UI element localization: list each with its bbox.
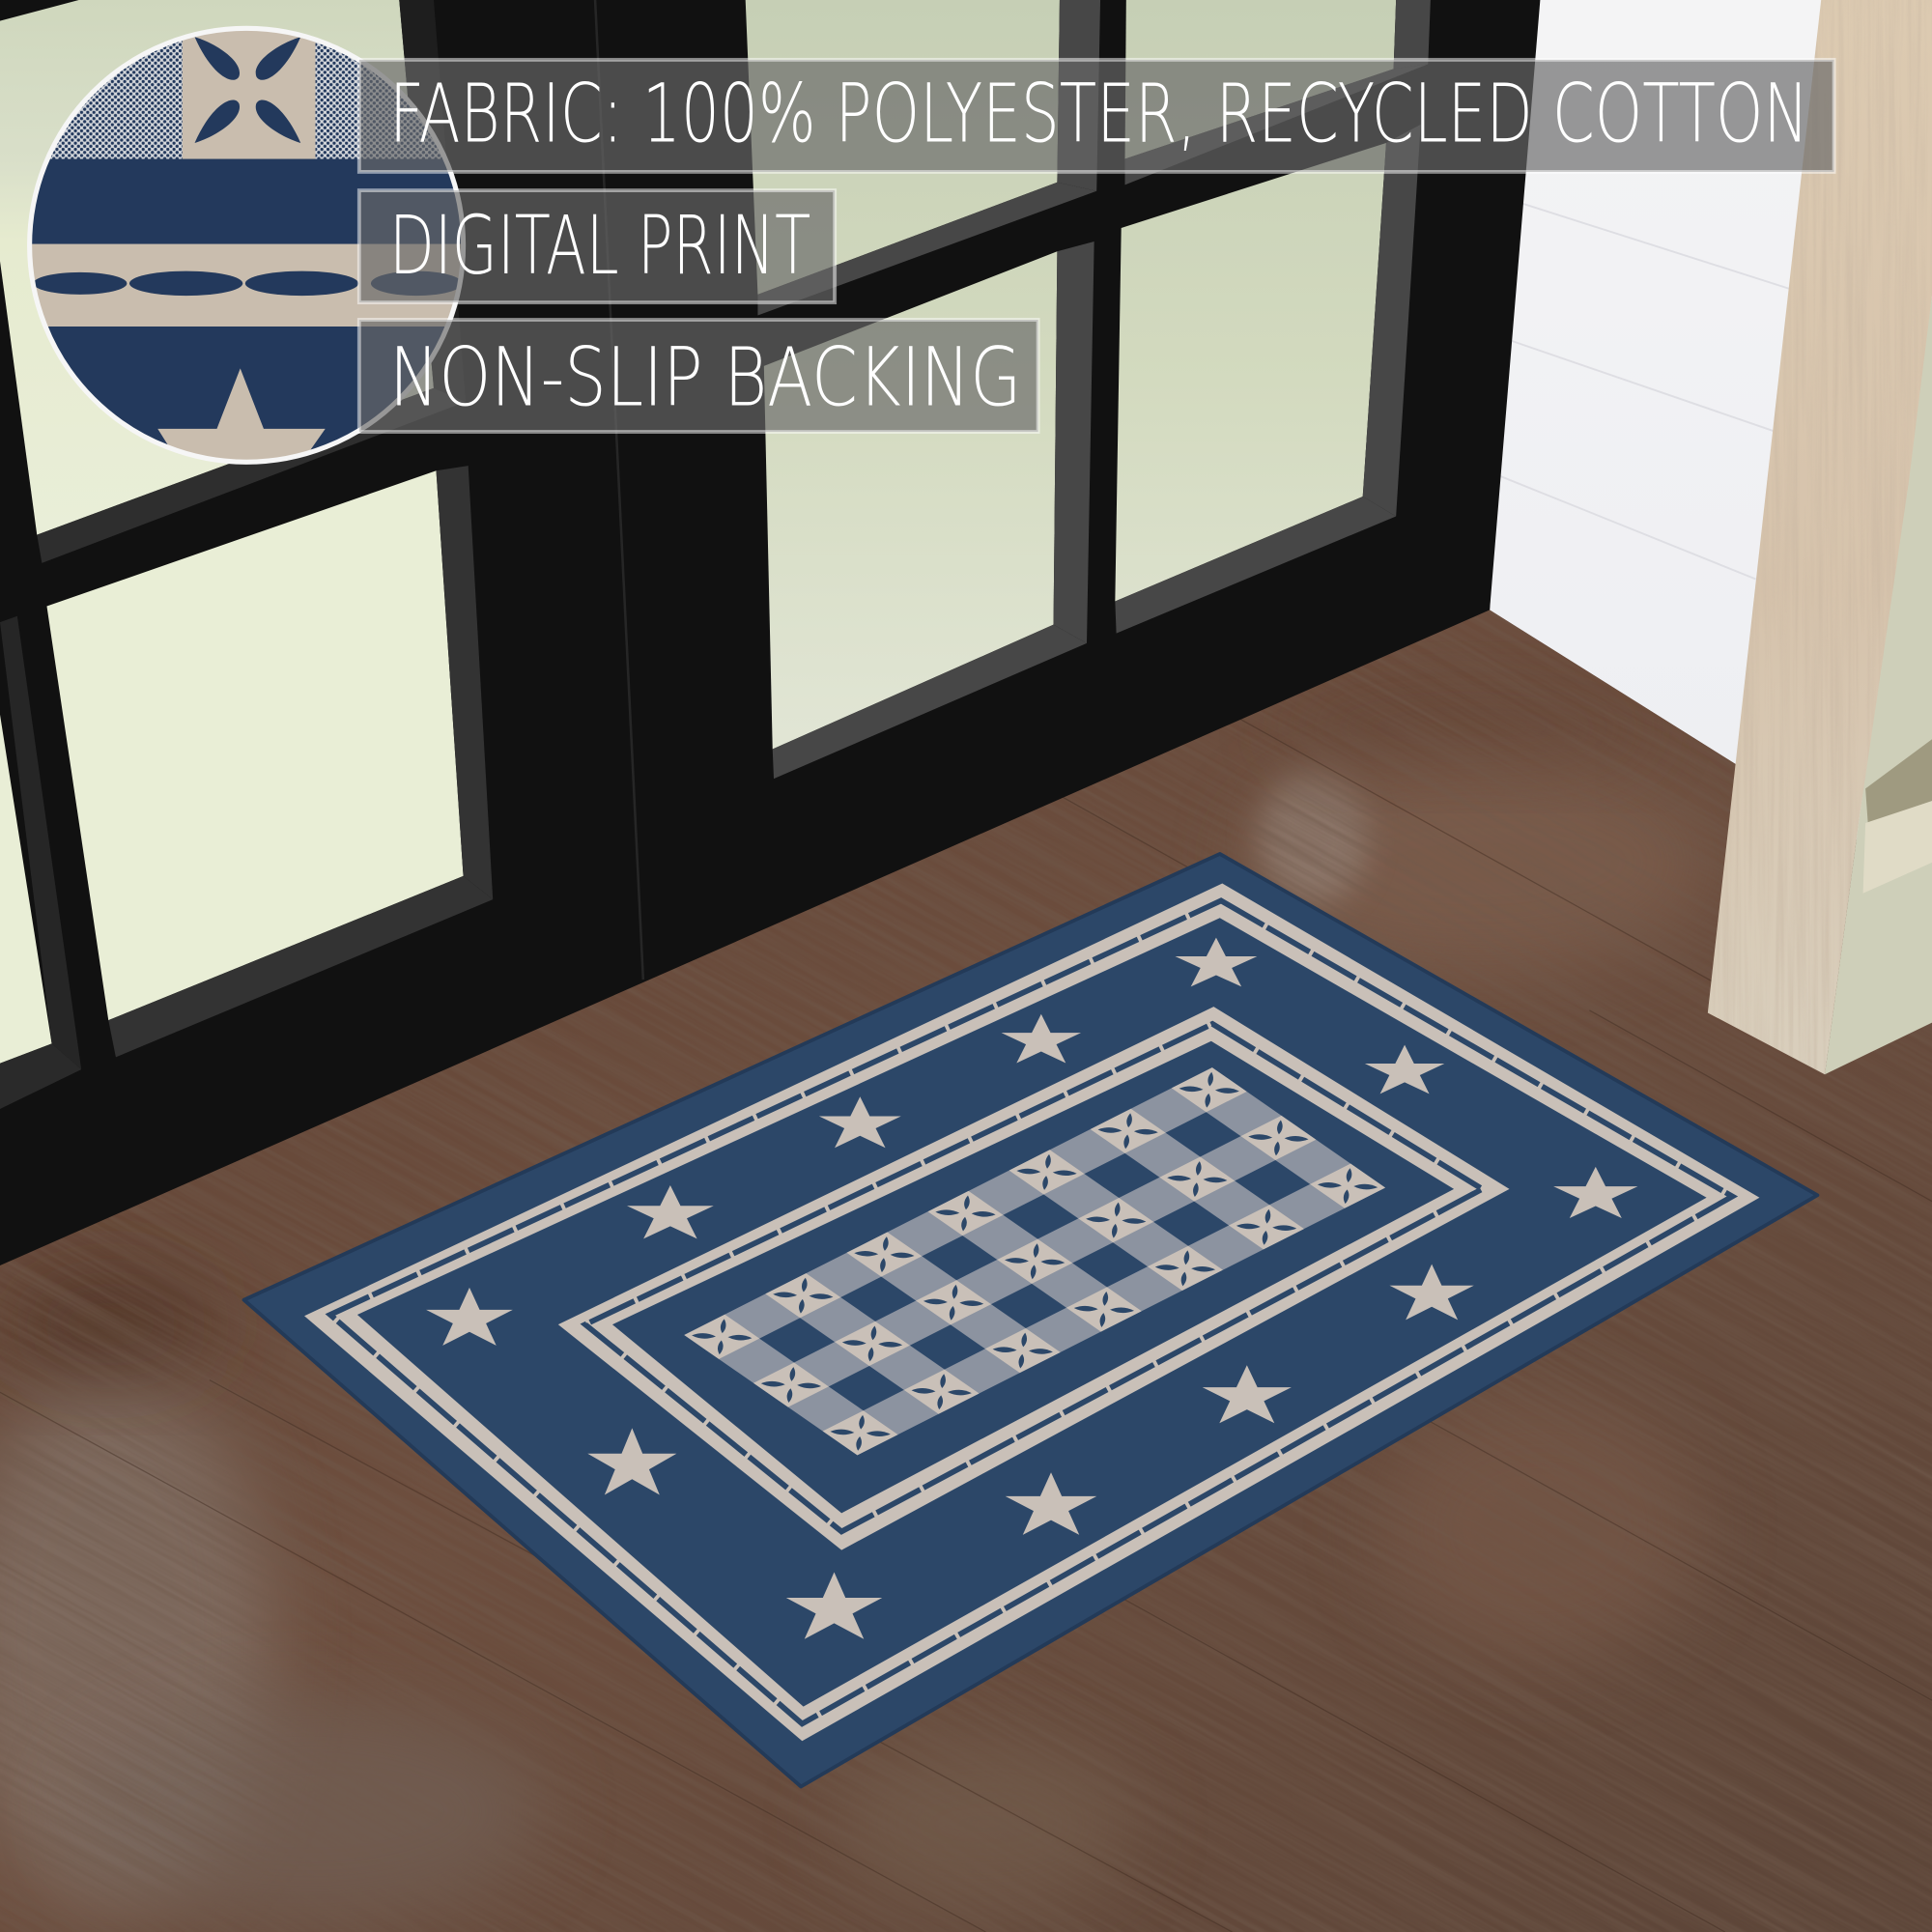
stars (426, 938, 1637, 1639)
cream band with lens chain (30, 244, 464, 327)
floor (0, 610, 1932, 1932)
wooden bench leg (1700, 0, 1932, 1078)
window panes right door (746, 0, 1396, 750)
cream star detail (157, 368, 326, 462)
wood grain (0, 610, 1932, 1932)
inner border band (558, 1007, 1509, 1550)
checkered centre panel (684, 1067, 1385, 1455)
label: digital print: DIGITAL PRINT (389, 198, 810, 293)
wall (1490, 0, 1932, 887)
label: digital print (359, 190, 835, 302)
label: non-slip backing (359, 320, 1038, 432)
rug base (244, 854, 1817, 1786)
label: non-slip backing: NON-SLIP BACKING (389, 330, 1021, 425)
window panes left door (0, 0, 464, 1064)
rug (244, 854, 1817, 1786)
cream square with petals (183, 28, 316, 159)
outer border band (304, 884, 1759, 1741)
window frame bevels (0, 0, 1431, 1109)
door frame (0, 0, 1540, 1265)
circular fabric close-up (30, 28, 464, 462)
